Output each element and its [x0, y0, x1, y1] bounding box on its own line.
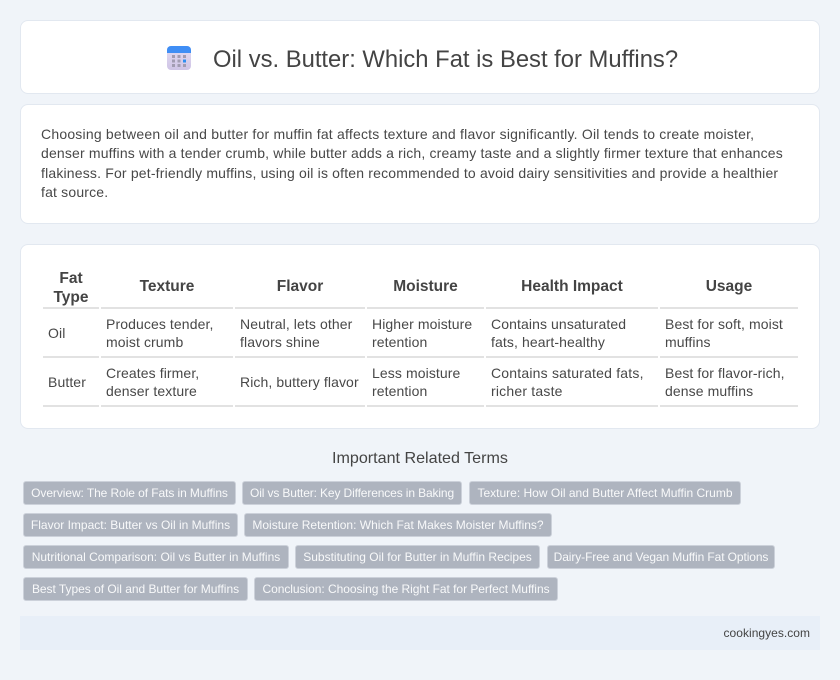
tag: Texture: How Oil and Butter Affect Muffin Crumb: [478, 486, 732, 500]
tag: Conclusion: Choosing the Right Fat for Perfect Muffins: [262, 582, 550, 596]
table row: butter: Rich, buttery flavor: [240, 374, 359, 390]
table row: butter: [48, 365, 785, 399]
table row: oil: [48, 316, 783, 350]
table: oil vs butter comparison: [43, 270, 798, 407]
footer bar: [20, 616, 820, 650]
tag: [295, 545, 540, 569]
table row: butter: richer taste: [491, 383, 563, 399]
tag: [254, 577, 558, 601]
table row: oil: fats, heart-healthy: [491, 334, 605, 350]
table row: oil: Contains unsaturated: [491, 316, 626, 332]
tag: Flavor Impact: Butter vs Oil in Muffins: [31, 518, 230, 532]
table row: oil: Oil: [48, 325, 65, 341]
tag: [547, 545, 775, 569]
table row: butter: Contains saturated fats,: [491, 365, 644, 381]
tag: [23, 513, 238, 537]
tag: Nutritional Comparison: Oil vs Butter in Muffins: [32, 550, 280, 564]
table row: butter: retention: [372, 383, 427, 399]
tag: [23, 577, 248, 601]
tag: [469, 481, 741, 505]
tag: [242, 481, 462, 505]
tag: Dairy-Free and Vegan Muffin Fat Options: [554, 550, 768, 564]
table header row: Health Impact: [521, 278, 623, 295]
panel: introduction: [20, 104, 820, 224]
icon: calendar: [167, 46, 191, 70]
heading: related terms: Important Related Terms: [332, 449, 508, 467]
tag: [23, 545, 289, 569]
text block: introduction: Choosing between oil and butter for muffin fat affects texture and flavor significantly. Oil tends to create moister,: [41, 126, 754, 142]
panel: comparison table: [20, 244, 820, 429]
footer credit: cookingyes.com: [724, 626, 810, 640]
table row: butter: dense muffins: [665, 383, 753, 399]
table row: oil: muffins: [665, 334, 711, 350]
table row: butter: Less moisture: [372, 365, 460, 381]
table row: butter: Creates firmer,: [106, 365, 199, 381]
title: Oil vs. Butter: Which Fat is Best for Muffins?: [213, 46, 678, 73]
table row: oil: Higher moisture: [372, 316, 472, 332]
table row: oil: flavors shine: [240, 334, 320, 350]
text block: introduction: [41, 126, 783, 200]
table header row: Moisture: [393, 278, 458, 295]
text block: introduction: fat source.: [41, 184, 108, 200]
text block: introduction: denser muffins with a tender crumb, while butter adds a rich, creamy taste and a slightly firmer texture that enhances: [41, 145, 783, 161]
tag: [23, 481, 236, 505]
panel: header: [20, 20, 820, 94]
table row: oil: retention: [372, 334, 427, 350]
table header row: Flavor: [277, 278, 323, 295]
tag: Best Types of Oil and Butter for Muffins: [32, 582, 239, 596]
tag: [244, 513, 552, 537]
table row: butter: Butter: [48, 374, 86, 390]
table header row: [53, 270, 752, 306]
tag: Moisture Retention: Which Fat Makes Moister Muffins?: [252, 518, 544, 532]
tag: Substituting Oil for Butter in Muffin Recipes: [303, 550, 532, 564]
table row: oil: Neutral, lets other: [240, 316, 352, 332]
text block: introduction: flakiness. For pet-friendly muffins, using oil is often recommended to avoid dairy sensitivities and provide a healthier: [41, 165, 778, 181]
table row: oil: Produces tender,: [106, 316, 213, 332]
table row: oil: Best for soft, moist: [665, 316, 783, 332]
tag: Overview: The Role of Fats in Muffins: [31, 486, 228, 500]
tag list: related terms: [23, 481, 775, 601]
table row: oil: moist crumb: [106, 334, 183, 350]
table row: butter: Best for flavor-rich,: [665, 365, 785, 381]
table header row: Fat Type: [53, 270, 89, 306]
table header row: Usage: [706, 278, 752, 295]
table row: butter: denser texture: [106, 383, 197, 399]
table header row: Texture: [140, 278, 194, 295]
tag: Oil vs Butter: Key Differences in Baking: [250, 486, 454, 500]
